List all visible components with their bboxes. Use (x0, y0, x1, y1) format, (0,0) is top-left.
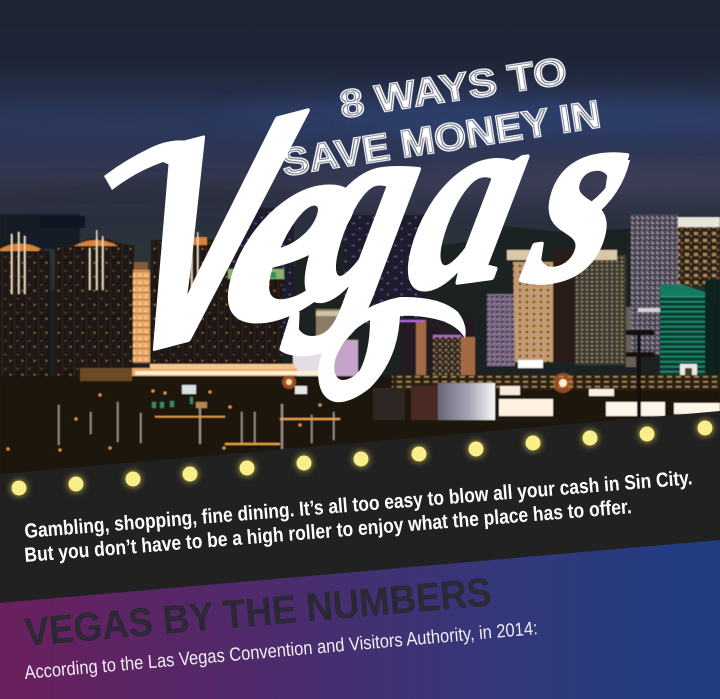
gold mosaic tower (513, 262, 556, 362)
pale hotel block (293, 309, 358, 380)
street lamp tower (626, 330, 654, 420)
g tail flourish (318, 297, 466, 402)
left tower one (0, 232, 50, 385)
green tower (660, 284, 705, 376)
title: Vegas script lettering: g (277, 54, 452, 359)
tall grey glass tower (631, 214, 678, 354)
title: Vegas script lettering: s (504, 45, 661, 339)
title: 8 ways to save money in: 8 WAYS TO (337, 50, 570, 127)
title: Vegas script lettering: V (74, 51, 343, 427)
night sky background (0, 0, 720, 300)
title: Vegas script lettering: a (387, 49, 559, 345)
s tail flourish (585, 160, 630, 218)
string of marquee lights (11, 420, 713, 496)
dark red tower (553, 250, 578, 362)
tan casino tower with green crown (228, 269, 284, 364)
low purple casino buildings (400, 318, 475, 376)
banner: dark slanted band (0, 411, 720, 660)
city skyline photo (0, 208, 720, 486)
dark green tower (705, 280, 720, 375)
street poles and lights (6, 385, 342, 452)
section subheading: According to the Las Vegas Convention and Visitors Authority, in 2014: (24, 618, 538, 684)
title: 8 ways to save money in (279, 50, 604, 185)
V left flourish (104, 140, 196, 190)
section heading: VEGAS BY THE NUMBERS (23, 570, 493, 655)
title: 8 ways to save money in: SAVE MONEY IN (279, 93, 604, 185)
orange lit tower (133, 262, 150, 363)
white sign on green tower (680, 364, 697, 382)
left tower two (55, 230, 134, 385)
navy tower centre (345, 215, 425, 323)
title: Vegas script lettering (74, 6, 670, 427)
purple striped tower (487, 294, 515, 366)
glowing billboards (411, 360, 720, 420)
panel: vegas by the numbers gradient band (0, 540, 720, 699)
low lit podium strip (80, 364, 720, 420)
navy tower with purple lights (228, 208, 294, 353)
central tower behind V (151, 228, 230, 365)
bronze glass tower (507, 250, 636, 367)
dark foreground ground (0, 376, 720, 486)
top right warm tower (678, 217, 720, 287)
intro text: But you don’t have to be a high roller to enjoy what the place has to offer. (24, 495, 632, 567)
flare lights (282, 373, 573, 393)
title: Vegas script lettering: e (201, 70, 391, 383)
